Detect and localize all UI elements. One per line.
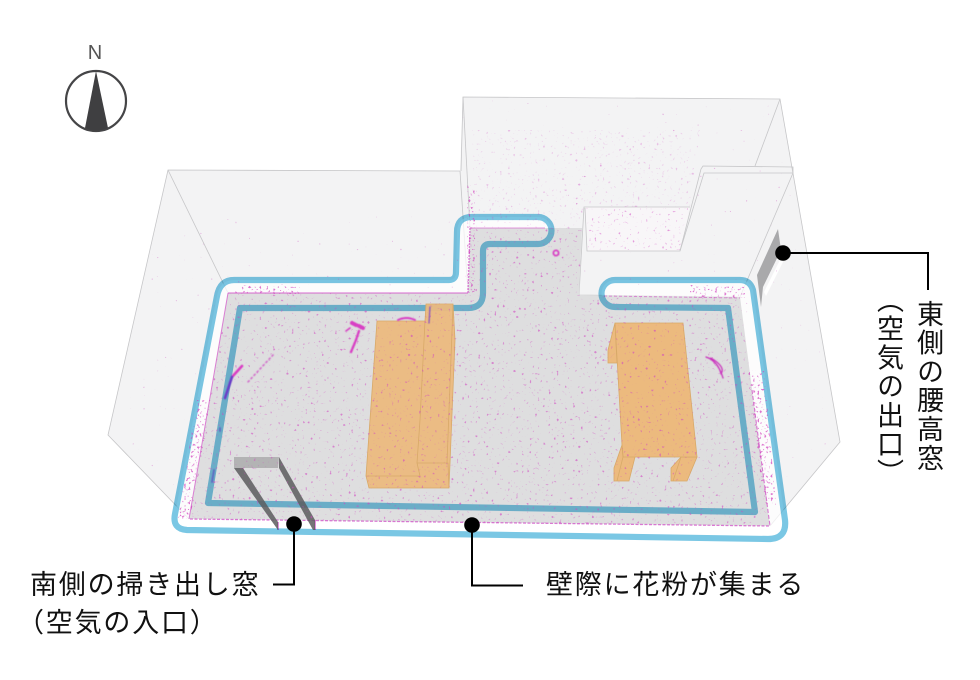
scattered pollen on the walls — [130, 100, 826, 485]
west table — [366, 304, 455, 488]
south sweep-out window — [234, 457, 315, 530]
east waist-high window — [757, 229, 783, 307]
east table — [608, 323, 697, 481]
white band between the two blue outlines — [174, 217, 785, 539]
scattered pollen in the notch — [586, 208, 686, 250]
callout: east window — [775, 245, 944, 473]
dense pollen near the walls — [178, 185, 776, 519]
label: south window: 南側の掃き出し窓 — [30, 570, 260, 600]
callout: wall gaps — [464, 517, 805, 600]
compass — [66, 42, 126, 131]
scattered pollen on the alcove back wall — [470, 130, 700, 230]
scattered pollen on the floor — [185, 225, 775, 530]
label: east window air outlet: （空気の出口） — [873, 286, 904, 488]
label: east window: 東側の腰高窓 — [913, 300, 944, 473]
north label: N — [88, 42, 102, 64]
label: wall gaps: 壁際に花粉が集まる — [546, 570, 805, 600]
label: south window: （空気の入口） — [17, 608, 219, 638]
room walls — [108, 97, 840, 526]
pollen along the wall edges — [189, 228, 770, 530]
blue outline loop around the wall-side zone — [174, 217, 785, 539]
pollen clusters on the floor — [212, 250, 723, 482]
callout: south window — [17, 516, 302, 638]
recessed notch in the east block wall — [579, 166, 793, 297]
floor — [189, 228, 770, 526]
